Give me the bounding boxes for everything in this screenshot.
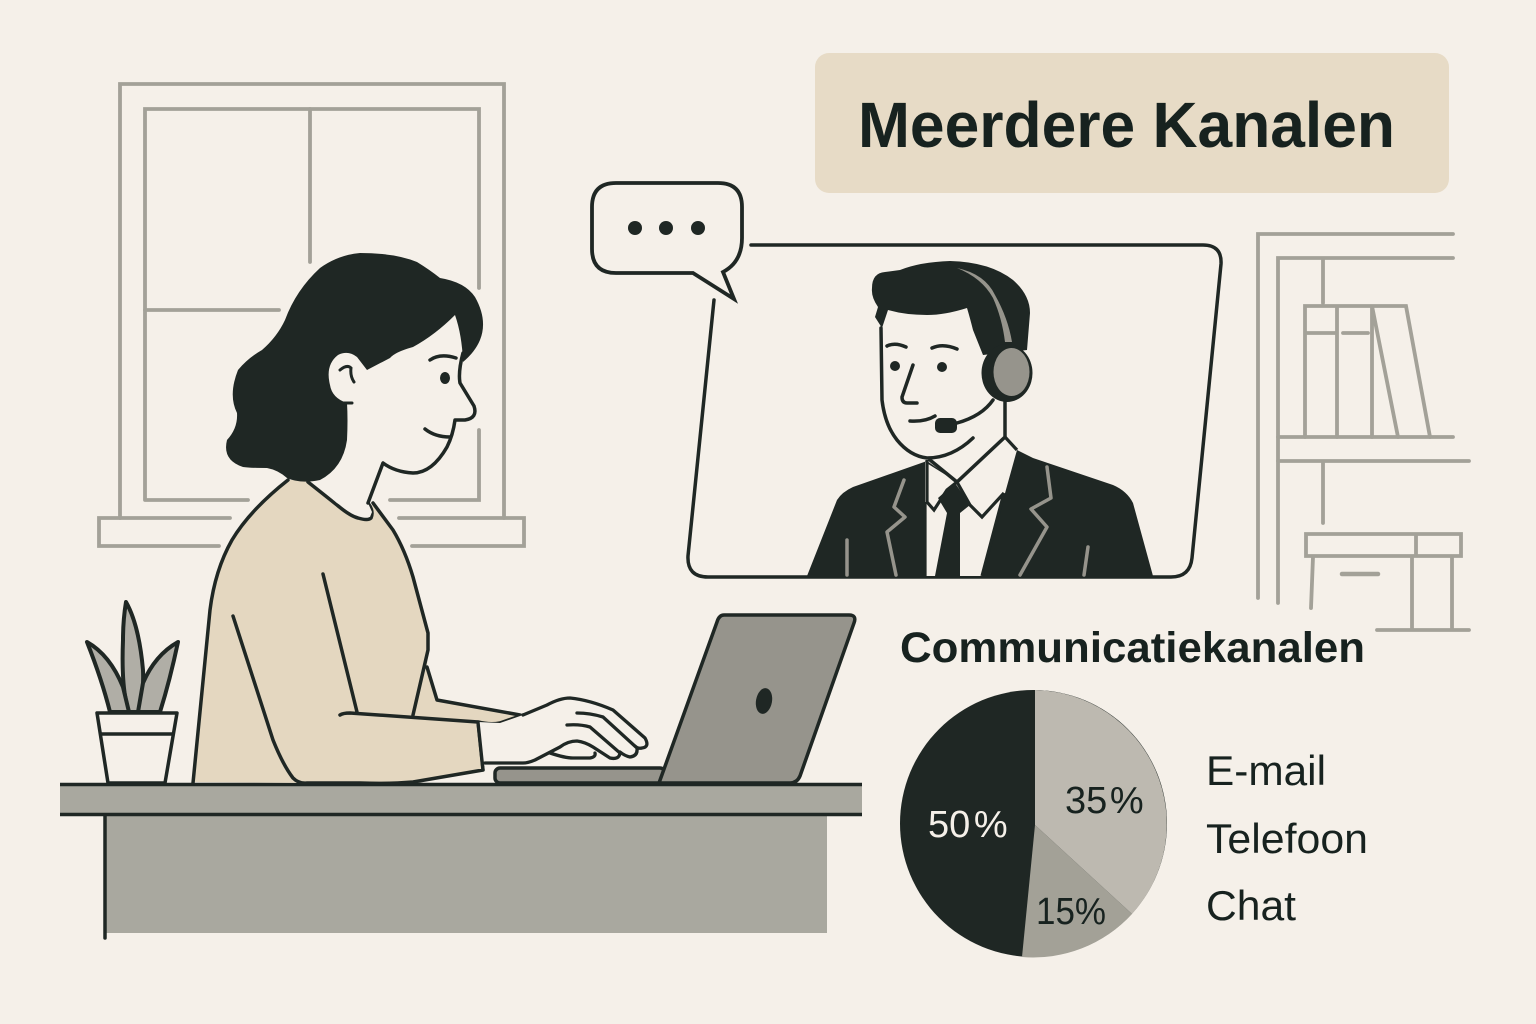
- hand: [478, 698, 646, 770]
- laptop: [495, 615, 855, 783]
- legend: Telefoon: [1206, 815, 1368, 862]
- legend: E-mail: [1206, 747, 1326, 794]
- title: Meerdere Kanalen: [858, 89, 1395, 161]
- pie chart: 50 %: [928, 804, 1008, 846]
- agent with headset: [807, 261, 1153, 576]
- pie chart: 35 %: [1065, 780, 1144, 822]
- legend: Chat: [1206, 882, 1296, 929]
- plant: [87, 602, 178, 783]
- woman: [193, 253, 647, 784]
- legend: [1206, 747, 1368, 929]
- bookshelf: [1258, 234, 1469, 630]
- sweater: [193, 480, 520, 784]
- face: [310, 315, 475, 517]
- video call frame: [688, 245, 1221, 577]
- hair: [226, 253, 483, 482]
- pie chart: 15%: [1036, 891, 1106, 933]
- title panel: [815, 53, 1449, 193]
- window: [99, 84, 524, 546]
- speech bubble: [592, 183, 742, 299]
- chart heading: Communicatiekanalen: [900, 624, 1365, 672]
- pie chart: [900, 690, 1167, 957]
- desk: [60, 784, 862, 938]
